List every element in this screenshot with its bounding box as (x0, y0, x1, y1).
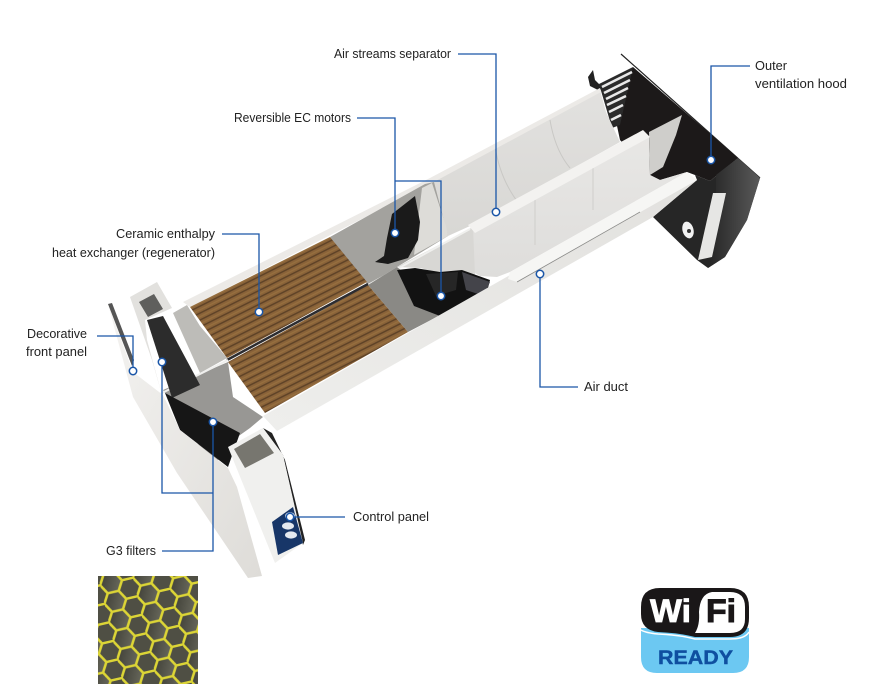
upper fan motor (375, 196, 420, 264)
outer ventilation hood (613, 54, 760, 268)
label: control panel: Control panel (353, 510, 429, 524)
label: reversible EC motors: Reversible EC motors (234, 111, 351, 125)
label: air streams separator: Air streams separator (334, 47, 451, 61)
control panel (272, 507, 303, 555)
left bay upper (173, 305, 227, 373)
label: G3 filters: G3 filters (106, 544, 156, 558)
badge separator line (641, 630, 749, 639)
wedge behind lower fan (397, 227, 475, 276)
badge black top (641, 588, 749, 637)
grille slats (588, 67, 633, 128)
READY: READY (658, 647, 733, 669)
decorative front panel (108, 303, 262, 578)
label: decorative front panel: Decorative (27, 327, 87, 341)
divider edge (158, 360, 228, 395)
G3 filter, upper (147, 316, 200, 398)
ceramic heat exchanger, upper block (190, 237, 367, 358)
air duct top strip (508, 172, 697, 282)
top edge of casing (183, 88, 601, 307)
upper compartment floor (330, 182, 448, 285)
separator thin edge (368, 229, 470, 285)
label: outer ventilation hood: ventilation hood (755, 77, 847, 91)
air streams separator strip (468, 130, 650, 233)
Wi: Wi (650, 593, 691, 629)
lower compartment floor (368, 267, 450, 332)
label: decorative front panel (26, 327, 87, 359)
Fi: Fi (706, 593, 736, 629)
badge base (641, 628, 749, 673)
right end profile (228, 428, 305, 563)
white Fi field (695, 592, 745, 633)
left end profile (130, 282, 172, 395)
air duct casing (263, 180, 697, 431)
honeycomb filter swatch (98, 576, 198, 684)
label: outer ventilation hood: Outer (755, 59, 787, 73)
label: ceramic enthalpy heat exchanger: Ceramic enthalpy (116, 227, 216, 241)
exchanger divider (227, 284, 368, 360)
right end plate (649, 115, 682, 175)
G3 filter, lower (165, 393, 240, 467)
leader lines (97, 54, 750, 551)
left bay lower (163, 362, 263, 467)
lower fan (397, 268, 490, 316)
Wi-Fi Ready badge (641, 588, 749, 673)
leader dots (129, 156, 715, 521)
illustration: cutaway ventilation unit (108, 54, 760, 578)
label: ceramic enthalpy heat exchanger: heat exchanger (regenerator) (52, 246, 215, 260)
label: decorative front panel: front panel (26, 345, 87, 359)
ceramic heat exchanger, lower block (228, 285, 408, 413)
upper compartment wall (430, 90, 620, 236)
label: air duct: Air duct (584, 380, 629, 394)
label: outer ventilation hood (755, 59, 847, 91)
gusset (414, 183, 448, 255)
lower compartment wall (473, 137, 687, 277)
left profile opening (139, 294, 163, 317)
label: ceramic enthalpy heat exchanger (52, 227, 216, 260)
